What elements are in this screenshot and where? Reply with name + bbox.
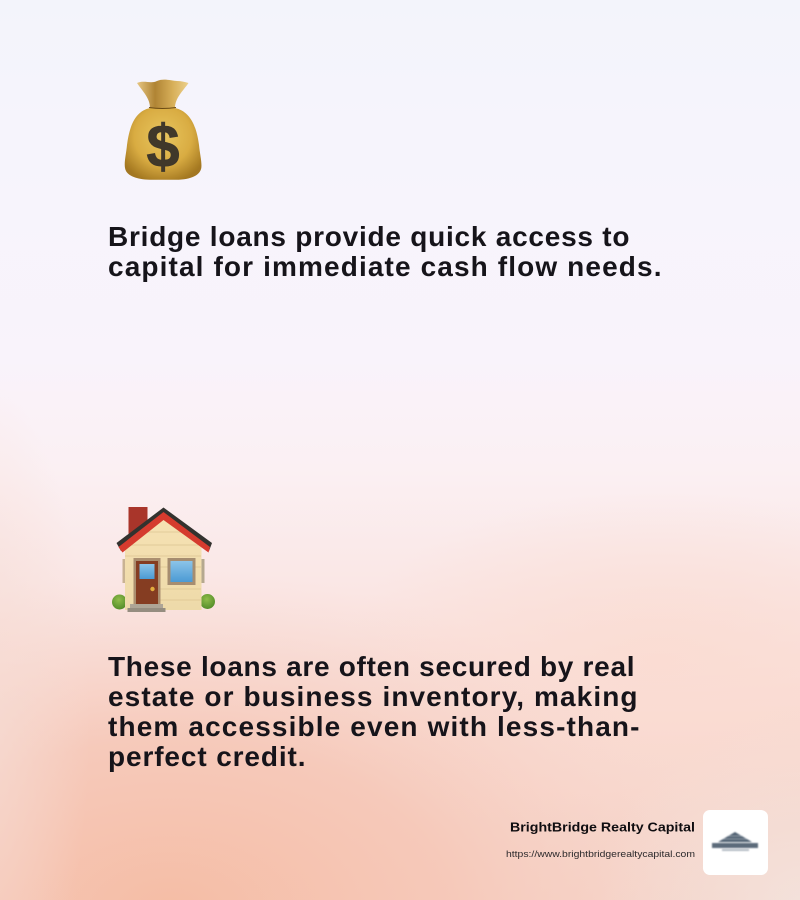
text block: secured by real estate or inventory: them accessible even with less-than- (108, 711, 640, 742)
text block: secured by real estate or inventory: These loans are often secured by real (108, 651, 634, 682)
text block: secured by real estate or inventory (108, 651, 640, 772)
icon: money bag (125, 80, 201, 180)
text block: secured by real estate or inventory: perfect credit. (108, 741, 306, 772)
footer: website url: https://www.brightbridgerealtycapital.com (506, 849, 695, 860)
text block: quick access to capital: Bridge loans provide quick access to (108, 221, 630, 252)
text block: quick access to capital (108, 221, 662, 282)
text block: quick access to capital: capital for immediate cash flow needs. (108, 251, 662, 282)
footer: company name: BrightBridge Realty Capital (510, 820, 695, 834)
logo tile (703, 810, 768, 875)
icon: money bag: $ (146, 113, 180, 180)
icon: house (112, 507, 215, 612)
text block: secured by real estate or inventory: estate or business inventory, making (108, 681, 638, 712)
